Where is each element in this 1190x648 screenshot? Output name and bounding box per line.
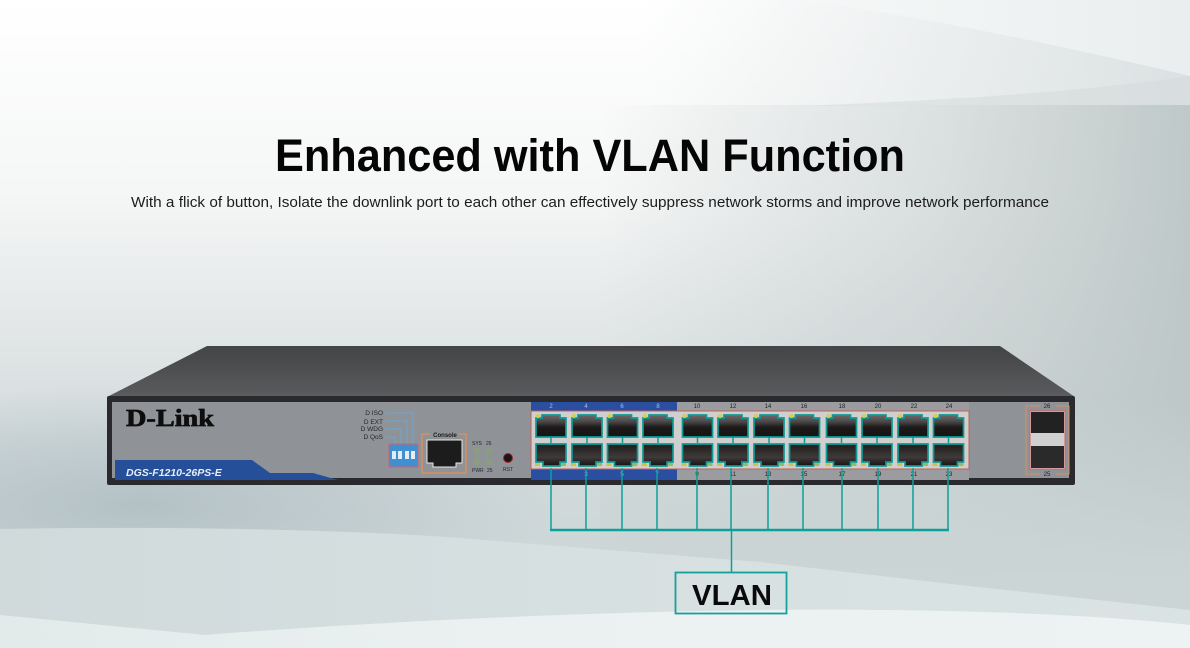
DIP switch labels: D ISO — [365, 410, 383, 417]
DIP switch labels — [361, 410, 413, 445]
D-Link logo: D-Link — [126, 406, 215, 432]
port cage — [531, 411, 969, 469]
reset button — [503, 454, 513, 473]
port numbers: 10 — [694, 404, 701, 410]
DIP switch labels: D EXT — [364, 419, 383, 426]
blue model band — [115, 460, 338, 480]
front panel — [112, 402, 1069, 478]
port numbers: 23 — [946, 472, 953, 478]
port numbers: 6 — [620, 404, 624, 410]
port numbers: 8 — [656, 404, 660, 410]
port numbers: 14 — [765, 404, 772, 410]
VLAN label box — [676, 572, 786, 614]
port numbers: 13 — [765, 472, 772, 478]
console port: Console — [433, 433, 457, 439]
VLAN connector lines — [550, 468, 949, 572]
status LEDs: 26 — [486, 441, 492, 447]
port numbers: 22 — [911, 404, 918, 410]
SFP ports: 25 — [1044, 472, 1051, 478]
VLAN label box: VLAN — [692, 580, 772, 612]
reset button: RST — [503, 467, 513, 473]
port numbers: 3 — [584, 472, 588, 478]
port numbers: 16 — [801, 404, 808, 410]
port numbers: 18 — [839, 404, 846, 410]
port numbers: 5 — [620, 472, 624, 478]
status LEDs — [472, 441, 493, 474]
status LEDs: 25 — [487, 468, 493, 474]
port numbers: 15 — [801, 472, 808, 478]
light port group background — [677, 402, 969, 480]
blue model band: DGS-F1210-26PS-E — [126, 467, 223, 479]
port numbers: 20 — [875, 404, 882, 410]
DIP switch labels: D QoS — [363, 434, 384, 441]
port numbers: 9 — [695, 472, 699, 478]
port numbers: 17 — [839, 472, 846, 478]
blue port group background — [531, 402, 677, 480]
DIP switch — [389, 444, 418, 467]
network switch — [107, 346, 1075, 485]
console port — [422, 432, 466, 473]
port numbers: 21 — [911, 472, 918, 478]
DIP switch labels: D WDG — [361, 426, 383, 433]
status LEDs: SYS — [472, 441, 483, 447]
port numbers — [549, 404, 953, 478]
switch top lid — [107, 346, 1075, 397]
switch front body — [107, 396, 1075, 485]
port numbers: 24 — [946, 404, 953, 410]
lower ports — [535, 444, 964, 466]
port numbers: 2 — [549, 404, 553, 410]
SFP ports — [1026, 403, 1069, 478]
title: Enhanced with VLAN Function — [275, 130, 905, 181]
status LEDs: PWR — [472, 468, 484, 474]
port numbers: 19 — [875, 472, 882, 478]
port numbers: 12 — [730, 404, 737, 410]
port numbers: 7 — [655, 472, 659, 478]
port numbers: 4 — [584, 404, 588, 410]
port numbers: 11 — [730, 472, 737, 478]
SFP ports: 26 — [1044, 404, 1051, 410]
upper ports — [536, 414, 964, 443]
subtitle: With a flick of button, Isolate the downlink port to each other can effectively suppress network storms and improve network performance — [131, 194, 1049, 211]
